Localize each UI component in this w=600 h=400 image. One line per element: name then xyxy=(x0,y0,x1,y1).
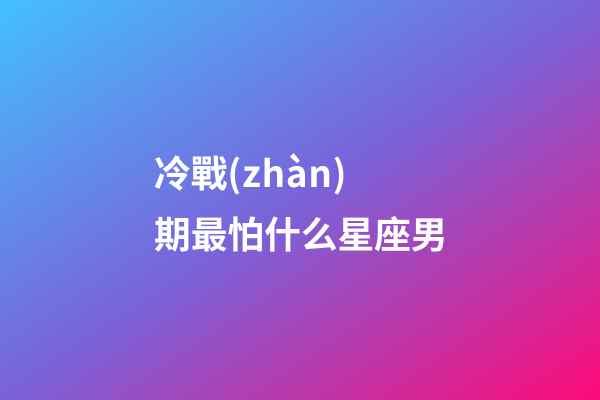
title xyxy=(154,144,448,259)
title line 1: 冷戰(zhàn) xyxy=(154,144,347,198)
title line 2: 期最怕什么星座男 xyxy=(154,205,448,259)
